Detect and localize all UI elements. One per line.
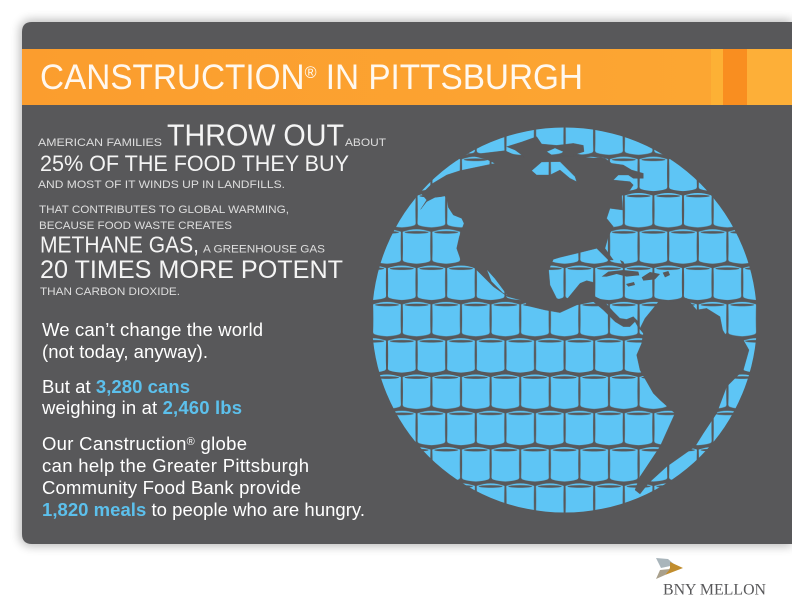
text block: can statistics: Our Canstruction bbox=[42, 433, 186, 454]
islands: Caribbean bbox=[602, 260, 670, 287]
text block: food waste facts: METHANE GAS, bbox=[40, 232, 199, 258]
text block: can statistics: But at 3,280 cans bbox=[42, 376, 190, 397]
logo: BNY Mellon bbox=[656, 558, 766, 598]
wordmark: BNY MELLON bbox=[663, 582, 766, 598]
text block: food waste facts: AND MOST OF IT WINDS UP IN LANDFILLS. bbox=[38, 179, 285, 191]
continents: the Americas bbox=[421, 137, 749, 494]
can pattern ocean bbox=[372, 127, 757, 513]
title banner bbox=[22, 49, 792, 105]
text block: can statistics: We can’t change the world bbox=[42, 319, 263, 340]
text block: can statistics: globe bbox=[195, 433, 247, 454]
text block: food waste facts: A GREENHOUSE GAS bbox=[203, 244, 325, 256]
text block: can statistics: ® bbox=[187, 436, 195, 448]
text block: can statistics bbox=[41, 319, 365, 520]
text block: food waste facts: THAT CONTRIBUTES TO GLOBAL WARMING, bbox=[39, 204, 289, 216]
text block: can statistics: 1,820 meals to people who are hungry. bbox=[42, 499, 365, 520]
text block: food waste facts bbox=[38, 118, 386, 298]
text block: food waste facts: 25% OF THE FOOD THEY BUY bbox=[40, 151, 349, 176]
title: ® bbox=[305, 63, 317, 82]
text block: food waste facts: ABOUT bbox=[345, 137, 386, 149]
text block: food waste facts: THROW OUT bbox=[167, 118, 344, 152]
text block: food waste facts: AMERICAN FAMILIES bbox=[38, 137, 162, 149]
text block: can statistics: (not today, anyway). bbox=[42, 341, 208, 362]
title: CANSTRUCTION bbox=[40, 58, 318, 97]
text block: can statistics: can help the Greater Pittsburgh bbox=[42, 455, 309, 476]
globe made of cans bbox=[372, 127, 757, 513]
text block: food waste facts: THAN CARBON DIOXIDE. bbox=[40, 286, 180, 298]
text block: food waste facts: BECAUSE FOOD WASTE CREATES bbox=[39, 220, 232, 232]
title: IN PITTSBURGH bbox=[317, 58, 583, 97]
icon: logo mark bbox=[656, 558, 683, 579]
text block: can statistics: Community Food Bank provide bbox=[42, 477, 301, 498]
text block: can statistics: weighing in at 2,460 lbs bbox=[41, 397, 242, 418]
text block: food waste facts: 20 TIMES MORE POTENT bbox=[40, 256, 343, 284]
